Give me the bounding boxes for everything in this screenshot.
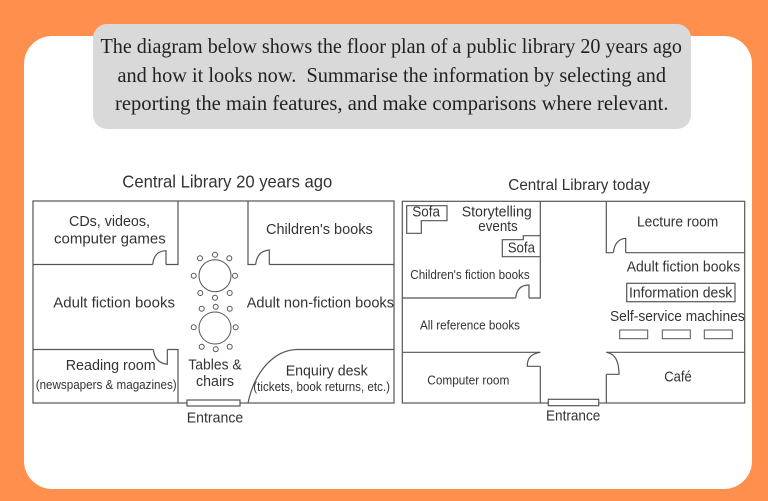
room labels of old floor plan: Reading room — [66, 357, 156, 374]
room labels of new floor plan: Self-service machines — [610, 308, 745, 325]
room labels of old floor plan: CDs, videos, — [69, 213, 150, 230]
walls of old floor plan — [33, 201, 394, 403]
old entrance — [187, 400, 240, 406]
task prompt text: The diagram below shows the floor plan of a public library 20 years ago — [100, 34, 682, 58]
task prompt text — [100, 34, 682, 115]
room labels of old floor plan: (tickets, book returns, etc.) — [253, 379, 390, 394]
room labels of new floor plan: Computer room — [427, 372, 509, 387]
upper table and chairs — [191, 252, 238, 300]
doors of old floor plan — [153, 250, 269, 364]
room labels of new floor plan: Storytelling — [462, 204, 532, 221]
room labels of new floor plan — [410, 204, 745, 424]
room labels of new floor plan: Café — [664, 369, 692, 386]
room labels of old floor plan: Adult fiction books — [53, 295, 175, 312]
new entrance — [548, 399, 599, 406]
self-service machines — [620, 330, 732, 339]
room labels of new floor plan: Adult fiction books — [627, 259, 740, 276]
panel: library 20 years ago — [33, 172, 394, 427]
sofa top left — [407, 206, 447, 233]
room labels of new floor plan: All reference books — [420, 317, 520, 332]
room labels of new floor plan: Entrance — [546, 407, 600, 424]
enquiry desk curved counter — [248, 350, 297, 403]
room labels of old floor plan: Entrance — [187, 410, 243, 427]
doors of new floor plan — [516, 238, 626, 374]
room labels of new floor plan: Sofa — [412, 204, 441, 221]
panel: task prompt background — [93, 24, 691, 129]
heading: Central Library today: Central Library today — [508, 177, 650, 194]
sofa by wall — [502, 236, 540, 257]
room labels of new floor plan: Information desk — [629, 285, 733, 302]
room labels of old floor plan: Adult non-fiction books — [247, 295, 394, 312]
room labels of old floor plan: computer games — [54, 230, 166, 247]
panel: library today — [402, 177, 745, 424]
room labels of old floor plan: Tables & — [188, 356, 242, 373]
task prompt text: and how it looks now. Summarise the information by selecting and — [118, 63, 666, 87]
heading: Central Library 20 years ago: Central Library 20 years ago — [122, 172, 332, 192]
room labels of old floor plan: (newspapers & magazines) — [36, 377, 177, 392]
room labels of new floor plan: Lecture room — [637, 214, 718, 231]
walls of new floor plan — [402, 201, 745, 403]
room labels of new floor plan: events — [478, 218, 518, 235]
room labels of old floor plan: chairs — [196, 373, 234, 390]
room labels of old floor plan: Enquiry desk — [286, 363, 368, 380]
lower table and chairs — [191, 304, 238, 352]
room labels of old floor plan — [36, 213, 394, 427]
information desk box — [627, 283, 735, 302]
room labels of new floor plan: Sofa — [508, 240, 536, 257]
room labels of new floor plan: Children's fiction books — [410, 267, 530, 282]
task prompt text: reporting the main features, and make comparisons where relevant. — [115, 91, 668, 115]
room labels of old floor plan: Children's books — [266, 221, 373, 238]
